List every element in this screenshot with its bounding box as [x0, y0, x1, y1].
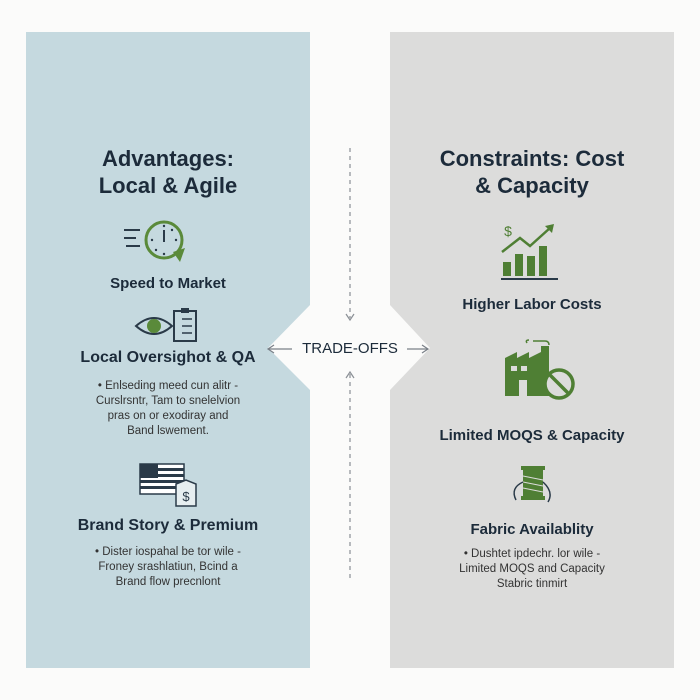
icon: flag and tag: $ — [182, 489, 190, 504]
arrow: top dashed — [346, 148, 354, 320]
heading: fabric availability: Fabric Availablity — [470, 521, 594, 538]
heading: constraints — [440, 146, 624, 198]
heading: advantages: Local & Agile — [99, 173, 237, 198]
text: brand bullet — [95, 546, 241, 588]
heading: constraints: & Capacity — [475, 173, 589, 198]
icon: rising bars — [501, 223, 558, 280]
text: fabric bullet: Stabric tinmirt — [497, 578, 567, 590]
icon: flag and tag — [139, 463, 197, 507]
icon: factory with ban — [505, 339, 575, 400]
arrow: bottom dashed — [346, 372, 354, 580]
icon: rising bars: $ — [504, 223, 512, 239]
icon: thread spool — [513, 466, 551, 502]
panel: advantages — [26, 32, 310, 668]
text: fabric bullet — [459, 548, 605, 590]
text: oversight bullet: • Enlseding meed cun alitr - — [98, 380, 238, 392]
heading: higher labor: Higher Labor Costs — [462, 296, 602, 313]
heading: speed to market: Speed to Market — [110, 275, 226, 292]
heading: brand story: Brand Story & Premium — [78, 517, 258, 534]
icon: eye and clipboard — [134, 308, 197, 342]
text: brand bullet: Froney srashlatiun, Bcind a — [98, 561, 238, 573]
text: oversight bullet — [96, 380, 240, 437]
arrow: left — [268, 345, 292, 353]
text: fabric bullet: • Dushtet ipdechr. lor wile - — [464, 548, 600, 560]
panel: constraints — [390, 32, 674, 668]
text: fabric bullet: Limited MOQS and Capacity — [459, 563, 605, 575]
label: trade-offs: TRADE-OFFS — [302, 340, 398, 357]
heading: advantages: Advantages: — [102, 146, 234, 171]
text: oversight bullet: Band lswement. — [127, 425, 209, 437]
heading: advantages — [99, 146, 237, 198]
text: brand bullet: • Dister iospahal be tor wile - — [95, 546, 241, 558]
text: oversight bullet: pras on or exodiray and — [108, 410, 228, 422]
heading: constraints: Constraints: Cost — [440, 146, 624, 171]
text: oversight bullet: Curslrsntr, Tam to snelelvion — [96, 395, 240, 407]
heading: limited moqs: Limited MOQS & Capacity — [439, 427, 625, 444]
arrow: right — [407, 345, 428, 353]
heading: local oversight: Local Oversighot & QA — [80, 349, 256, 366]
icon: clock — [124, 220, 185, 262]
text: brand bullet: Brand flow precnlont — [116, 576, 220, 588]
